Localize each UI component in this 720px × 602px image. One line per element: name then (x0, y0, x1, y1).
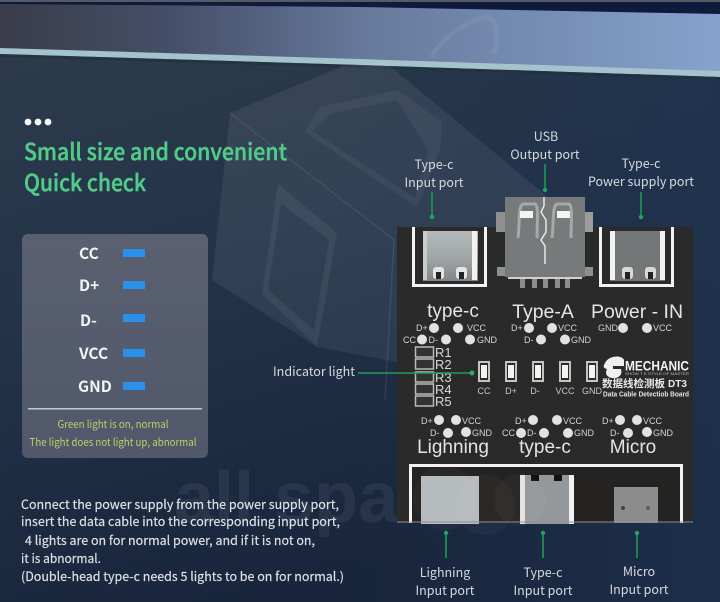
legend notes (30, 417, 197, 450)
instructions text: Connect the power supply from the power supply port, (21, 494, 339, 513)
legend labels: CC (79, 242, 99, 264)
test pad labels top (403, 323, 673, 345)
label: indicator light: Indicator light (273, 361, 355, 380)
legend labels: GND (78, 375, 112, 397)
instructions text (21, 494, 344, 585)
port labels top: Power supply port (588, 171, 694, 190)
test pad labels top: GND (598, 323, 618, 333)
port: bottom type-c (520, 475, 574, 524)
port labels bottom: Input port (513, 580, 573, 599)
indicator LEDs (478, 362, 602, 396)
test pad labels bottom: GND (472, 428, 492, 438)
test pad labels bottom: CC (502, 428, 515, 438)
port labels bottom: Micro (623, 561, 655, 580)
legend notes: Green light is on, normal (58, 417, 169, 432)
watermark: hexagon with device icons (212, 62, 600, 400)
board section labels bottom: type-c (519, 437, 571, 458)
legend labels: D- (80, 309, 97, 331)
test pad labels top: D+ (511, 323, 523, 333)
arrow: indicator light (358, 370, 474, 376)
port labels bottom: Input port (415, 580, 475, 599)
logo: Mechanic DT3 (602, 357, 690, 398)
decorative dots (25, 119, 51, 125)
test pad labels bottom: VCC (563, 416, 583, 426)
test pad labels top: D+ (416, 323, 428, 333)
port labels top: Type-c (414, 154, 454, 173)
legend blue lights (123, 249, 145, 390)
indicator LEDs: D+ (505, 386, 517, 396)
indicator LEDs: GND (582, 386, 602, 396)
test pad labels top: D- (428, 335, 438, 345)
port labels bottom: Lighning (420, 562, 470, 581)
logo: Mechanic DT3: 数据线检测板 (602, 376, 665, 391)
test pad labels top: CC (403, 335, 416, 345)
port: power type-c (600, 227, 672, 286)
test pad labels top: VCC (467, 323, 487, 333)
test pad labels bottom: GND (574, 428, 594, 438)
board section labels bottom (417, 437, 656, 458)
resistor pads R1 to R5 (416, 345, 452, 409)
watermark text: all spares (174, 458, 506, 538)
logo: Mechanic DT3: DT3 (668, 379, 687, 390)
test pad labels bottom: D+ (421, 416, 433, 426)
logo: Mechanic DT3: Data Cable Detectiob Board (603, 392, 689, 398)
port labels top: USB (534, 126, 558, 145)
board section labels top (427, 301, 683, 323)
port labels top: Output port (510, 144, 580, 163)
resistor pads R1 to R5: R2 (435, 357, 452, 372)
test pad labels top: GND (571, 335, 592, 345)
panel: circuit board (397, 197, 693, 535)
test pad labels bottom: D- (610, 428, 620, 438)
resistor pads R1 to R5: R3 (435, 370, 452, 385)
instructions text: (Double-head type-c needs 5 lights to be on for normal.) (21, 566, 344, 585)
test pad labels bottom: VCC (643, 416, 663, 426)
test pad labels top: VCC (558, 323, 578, 333)
port labels top: Type-c (621, 153, 661, 172)
indicator LEDs: D- (530, 386, 540, 396)
board section labels bottom: Micro (610, 437, 656, 458)
test pad labels bottom: D+ (602, 416, 614, 426)
heading (24, 133, 287, 198)
arrows: bottom ports (444, 531, 639, 558)
port labels bottom (415, 561, 669, 599)
indicator LEDs: VCC (555, 386, 575, 396)
board section labels bottom: Lighning (417, 437, 489, 458)
panel: indicator legend (22, 234, 208, 458)
test pad labels top: VCC (653, 323, 673, 333)
test pads top (417, 323, 652, 344)
port: micro (614, 487, 658, 523)
port labels top: Input port (404, 172, 464, 191)
instructions text: it is abnormal. (21, 548, 101, 567)
logo: Mechanic DT3: MECHANIC (625, 358, 689, 374)
board section labels top: Type-A (512, 301, 574, 323)
legend labels: D+ (79, 274, 99, 296)
test pad labels bottom: D- (430, 428, 440, 438)
resistor pads R1 to R5: R5 (435, 394, 452, 409)
legend notes: The light does not light up, abnormal (30, 435, 197, 450)
test pad labels bottom: D- (527, 428, 536, 438)
port labels bottom: Type-c (523, 562, 563, 581)
test pad labels bottom: GND (653, 428, 674, 438)
resistor pads R1 to R5: R1 (435, 345, 452, 360)
heading: Small size and convenient (24, 133, 287, 167)
logo: Mechanic DT3: SHOW T E STYLE OF MASTER (625, 372, 690, 376)
legend labels (78, 242, 112, 397)
test pads bottom (434, 415, 652, 438)
legend labels: VCC (78, 342, 108, 364)
port labels bottom: Input port (609, 579, 669, 598)
icon: phone (262, 184, 337, 346)
test pad labels bottom (421, 416, 674, 438)
board section labels top: Power - IN (591, 301, 683, 323)
test pad labels bottom: D+ (515, 416, 527, 426)
test pad labels top: GND (477, 335, 498, 345)
top glossy band (0, 0, 720, 80)
indicator LEDs: CC (478, 386, 491, 396)
port: top type-c input (414, 227, 486, 286)
instructions text: insert the data cable into the corresponding input port, (21, 511, 340, 530)
instructions text: 4 lights are on for normal power, and if it is not on, (25, 530, 315, 549)
arrows: top ports (430, 164, 643, 219)
bottom port bay (397, 466, 693, 535)
test pad labels top: D- (524, 335, 534, 345)
board section labels top: type-c (427, 301, 479, 322)
test pad labels bottom: VCC (462, 416, 482, 426)
port labels top (404, 126, 694, 191)
icon: tablet (305, 90, 442, 207)
resistor pads R1 to R5: R4 (435, 382, 452, 397)
port: lightning (421, 476, 479, 524)
heading: Quick check (24, 164, 146, 198)
port: USB output (496, 197, 593, 288)
